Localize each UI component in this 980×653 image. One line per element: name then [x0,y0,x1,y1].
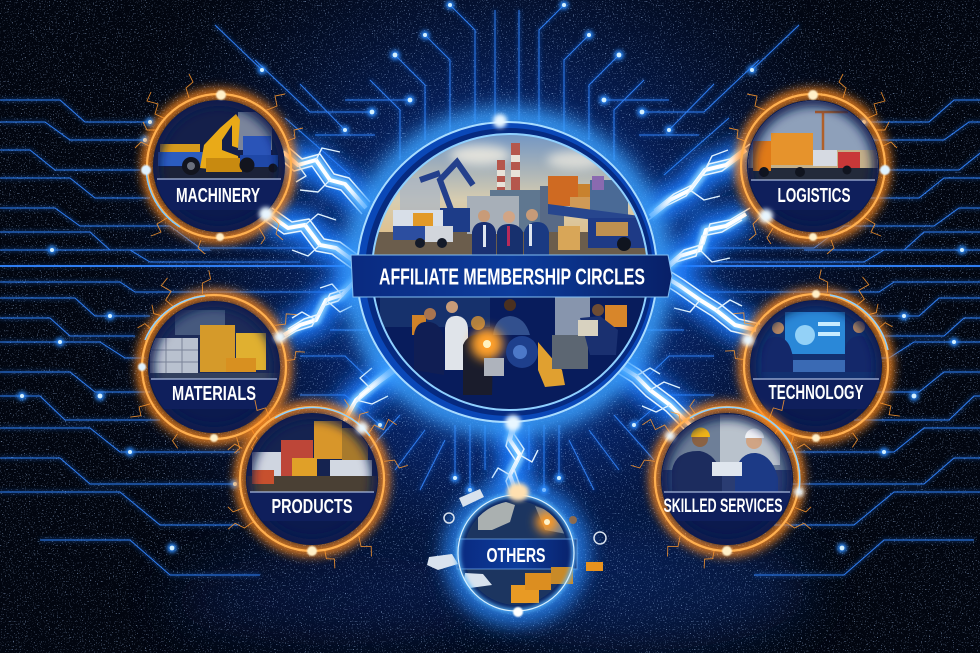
circle: others [427,483,606,617]
circle: products [226,394,408,568]
products scene [247,418,377,492]
logistics label [751,180,875,210]
others label: OTHERS [486,545,546,567]
floating vehicles and icons [427,489,606,588]
center bottom glow [505,415,521,431]
globe scene [466,501,566,605]
machinery scene [156,105,282,178]
products label: PRODUCTS [272,496,352,518]
materials label [151,379,277,409]
center ring inner line [372,134,648,410]
others ring [458,483,574,617]
lightning bolts [264,144,760,504]
skilled services label [664,492,790,521]
center title: AFFILIATE MEMBERSHIP CIRCLES [379,264,645,290]
skilled services scene [662,414,792,496]
circle: technology [725,269,902,452]
circle: materials [128,270,305,454]
products label [250,492,376,521]
skilled services ring [655,407,804,556]
skilled services label: SKILLED SERVICES [664,496,782,517]
logistics scene [748,101,878,180]
circle: logistics [729,74,897,254]
machinery ring [141,90,291,241]
center title banner [351,255,672,297]
products ring [240,407,384,556]
materials ring [138,295,286,442]
machinery label [157,179,281,210]
logistics ring [741,90,890,241]
materials scene [149,303,279,381]
logistics label: LOGISTICS [778,185,850,207]
orange delivery trucks [511,562,603,603]
machinery label: MACHINERY [176,185,260,207]
technology label: TECHNOLOGY [768,382,864,404]
circle: machinery [135,74,303,254]
circle: skilled services [631,394,812,568]
center scene: industry and business people [370,132,650,416]
technology label [753,379,879,409]
technology ring [742,290,888,442]
center circle [351,114,672,431]
center top glow [493,114,507,128]
others label [457,539,577,569]
technology scene [751,301,881,379]
materials label: MATERIALS [172,383,256,405]
